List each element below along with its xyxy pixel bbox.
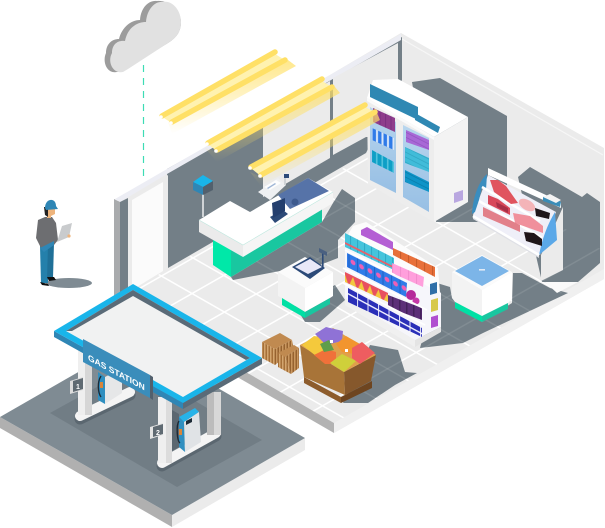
dashed cloud connection line bbox=[142, 65, 144, 178]
second shelf goods bbox=[347, 253, 424, 297]
white tile patch near meat case bbox=[545, 282, 578, 293]
floor tile grid bbox=[140, 158, 552, 418]
gas station forecourt bbox=[0, 340, 305, 527]
canopy bbox=[54, 284, 262, 409]
promotion table bbox=[452, 255, 512, 322]
blue sensor cube bbox=[193, 175, 213, 217]
third shelf goods bbox=[345, 272, 422, 320]
fuel island 1 with pump bbox=[78, 345, 130, 419]
back wall with door and windows bbox=[114, 34, 408, 300]
cash register bbox=[258, 174, 289, 200]
refrigerator cabinets bbox=[367, 79, 468, 222]
baskets bbox=[262, 333, 299, 374]
cuts of meat bbox=[483, 180, 550, 246]
gas station sign bbox=[83, 339, 153, 400]
person bbox=[36, 200, 92, 288]
weighing table bbox=[278, 248, 333, 318]
top shelf goods bbox=[345, 227, 435, 277]
POS terminal bbox=[270, 198, 288, 223]
glass door right bbox=[403, 125, 429, 212]
fuel island 2 with pump bbox=[158, 392, 221, 466]
ceiling lights bbox=[159, 52, 380, 186]
pump number plate 2: 2 bbox=[156, 430, 160, 437]
icon: cloud bbox=[105, 1, 181, 72]
end cap goods bbox=[430, 282, 438, 328]
digital scale bbox=[292, 248, 327, 279]
produce bin bbox=[300, 327, 376, 403]
right wall and floor slab bbox=[118, 33, 604, 433]
floor shadows bbox=[231, 78, 600, 403]
fruit and vegetables bbox=[302, 327, 375, 372]
checkout counter bbox=[199, 174, 333, 277]
pump number plate 1: 1 bbox=[76, 384, 80, 391]
bottom shelf goods bbox=[348, 288, 422, 337]
pump number plate 2 bbox=[150, 423, 163, 439]
meat display case bbox=[472, 168, 563, 281]
conveyor belt bbox=[278, 178, 329, 209]
glass door left bbox=[370, 107, 396, 193]
faint grid over shadows bbox=[256, 174, 600, 398]
pump number plate 1 bbox=[70, 377, 83, 394]
sign text: GAS STATION bbox=[88, 353, 145, 392]
shelving unit bbox=[343, 222, 441, 347]
